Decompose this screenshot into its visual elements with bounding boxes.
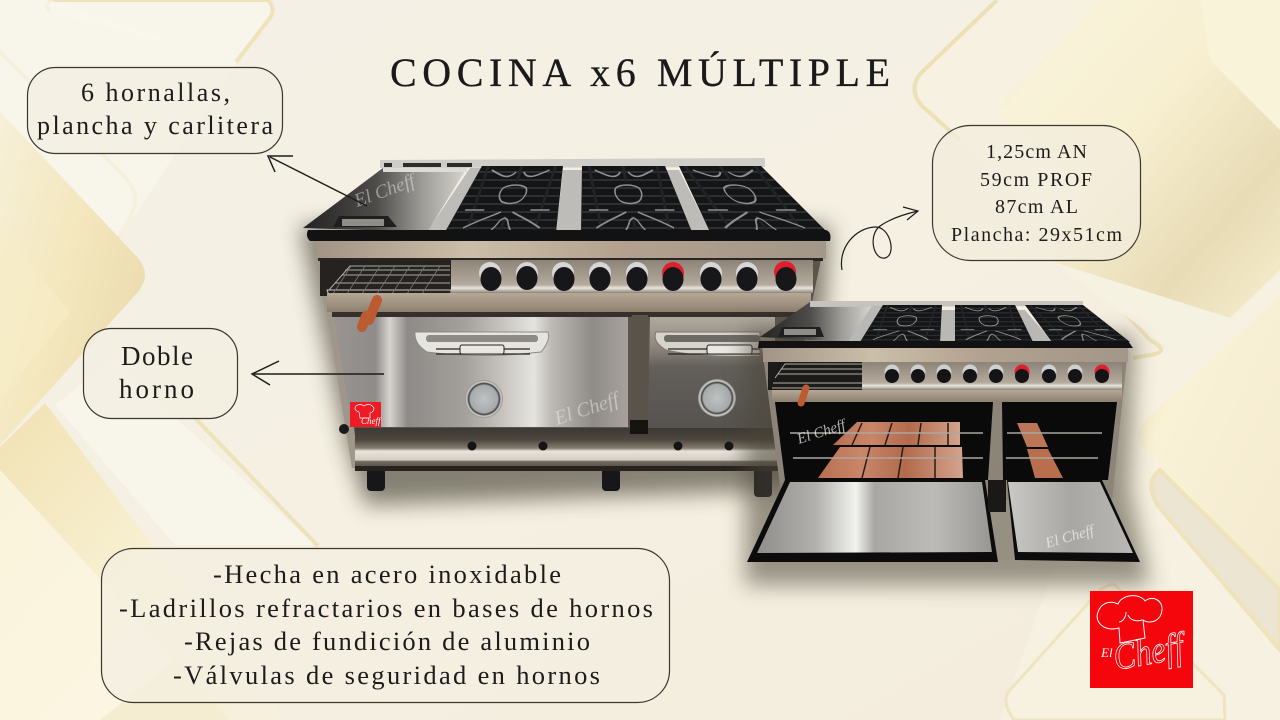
callout: double oven — [84, 328, 238, 418]
callout: dimensions — [932, 126, 1140, 260]
grill rack — [320, 260, 451, 298]
griddle — [303, 162, 467, 232]
arrow: to double oven callout — [252, 361, 384, 385]
small orange rack handle — [801, 388, 806, 403]
arrow: to griddle callout — [268, 156, 367, 206]
callout: double oven: horno — [119, 374, 194, 404]
small control panel — [862, 362, 1122, 390]
oven base with burner holes — [339, 420, 779, 471]
callout: burners and griddle — [28, 68, 282, 154]
logo sticker on door: Cheff — [361, 416, 382, 426]
callout: burners and griddle: 6 hornallas, — [81, 78, 230, 107]
logo: El Cheff — [1090, 591, 1193, 688]
control panel — [451, 260, 813, 293]
logo sticker on door — [350, 402, 382, 427]
small griddle — [760, 302, 872, 342]
small body — [762, 348, 1128, 500]
small counter edge — [758, 341, 1133, 348]
callout: dimensions: 1,25cm AN — [986, 141, 1087, 163]
watermarks — [351, 170, 624, 430]
logo: El Cheff: El — [1100, 645, 1113, 660]
left oven cavity with bricks — [775, 402, 993, 480]
orange rack handle — [362, 300, 377, 327]
small watermarks: El Cheff — [794, 417, 849, 448]
door hinge block — [988, 480, 1006, 512]
burner grates — [446, 166, 825, 230]
left open door — [747, 480, 998, 562]
oven legs — [367, 468, 772, 497]
lower shelf band — [327, 293, 811, 312]
callout: features list — [102, 548, 670, 702]
steel gaps between burners — [427, 168, 710, 232]
black counter edge — [307, 230, 830, 241]
front band — [316, 241, 826, 259]
small watermarks: El Cheff — [1043, 522, 1098, 552]
small stove with open ovens — [745, 301, 1166, 585]
logo: El Cheff: Cheff — [1110, 625, 1190, 679]
watermarks: El Cheff — [351, 170, 420, 212]
callout: dimensions: Plancha: 29x51cm — [951, 224, 1122, 246]
small rack — [768, 362, 862, 390]
callout: features list: -Hecha en acero inoxidable — [213, 559, 561, 589]
small steel gaps — [848, 306, 1052, 342]
small backsplash — [810, 301, 1083, 307]
callout: features list: -Rejas de fundición de aluminio — [184, 626, 590, 656]
watermarks: El Cheff — [551, 388, 624, 430]
right oven door — [648, 317, 775, 427]
small lower band — [772, 390, 1122, 402]
right open door — [1007, 480, 1140, 562]
stove shadow — [300, 225, 830, 505]
large stove — [300, 158, 878, 505]
callout: features list: -Válvulas de seguridad en hornos — [173, 660, 600, 690]
title: COCINA x6 MÚLTIPLE — [390, 50, 890, 95]
knobs — [479, 261, 796, 291]
small knobs — [884, 364, 1110, 383]
callout: burners and griddle: plancha y carlitera — [37, 111, 273, 140]
callout: dimensions: 59cm PROF — [980, 169, 1092, 191]
left oven door — [334, 317, 628, 427]
right oven cavity with bricks — [1002, 402, 1117, 480]
stove body — [315, 240, 825, 470]
arrow: curly to dimensions callout — [841, 207, 918, 270]
center divider post — [632, 315, 648, 432]
callout: double oven: Doble — [121, 341, 193, 371]
small grates — [860, 305, 1130, 342]
small watermarks — [794, 417, 1098, 552]
backsplash — [380, 158, 765, 168]
callout: features list: -Ladrillos refractarios en bases de hornos — [119, 593, 653, 623]
small stove shadow — [745, 330, 1150, 585]
callout: dimensions: 87cm AL — [995, 196, 1078, 218]
